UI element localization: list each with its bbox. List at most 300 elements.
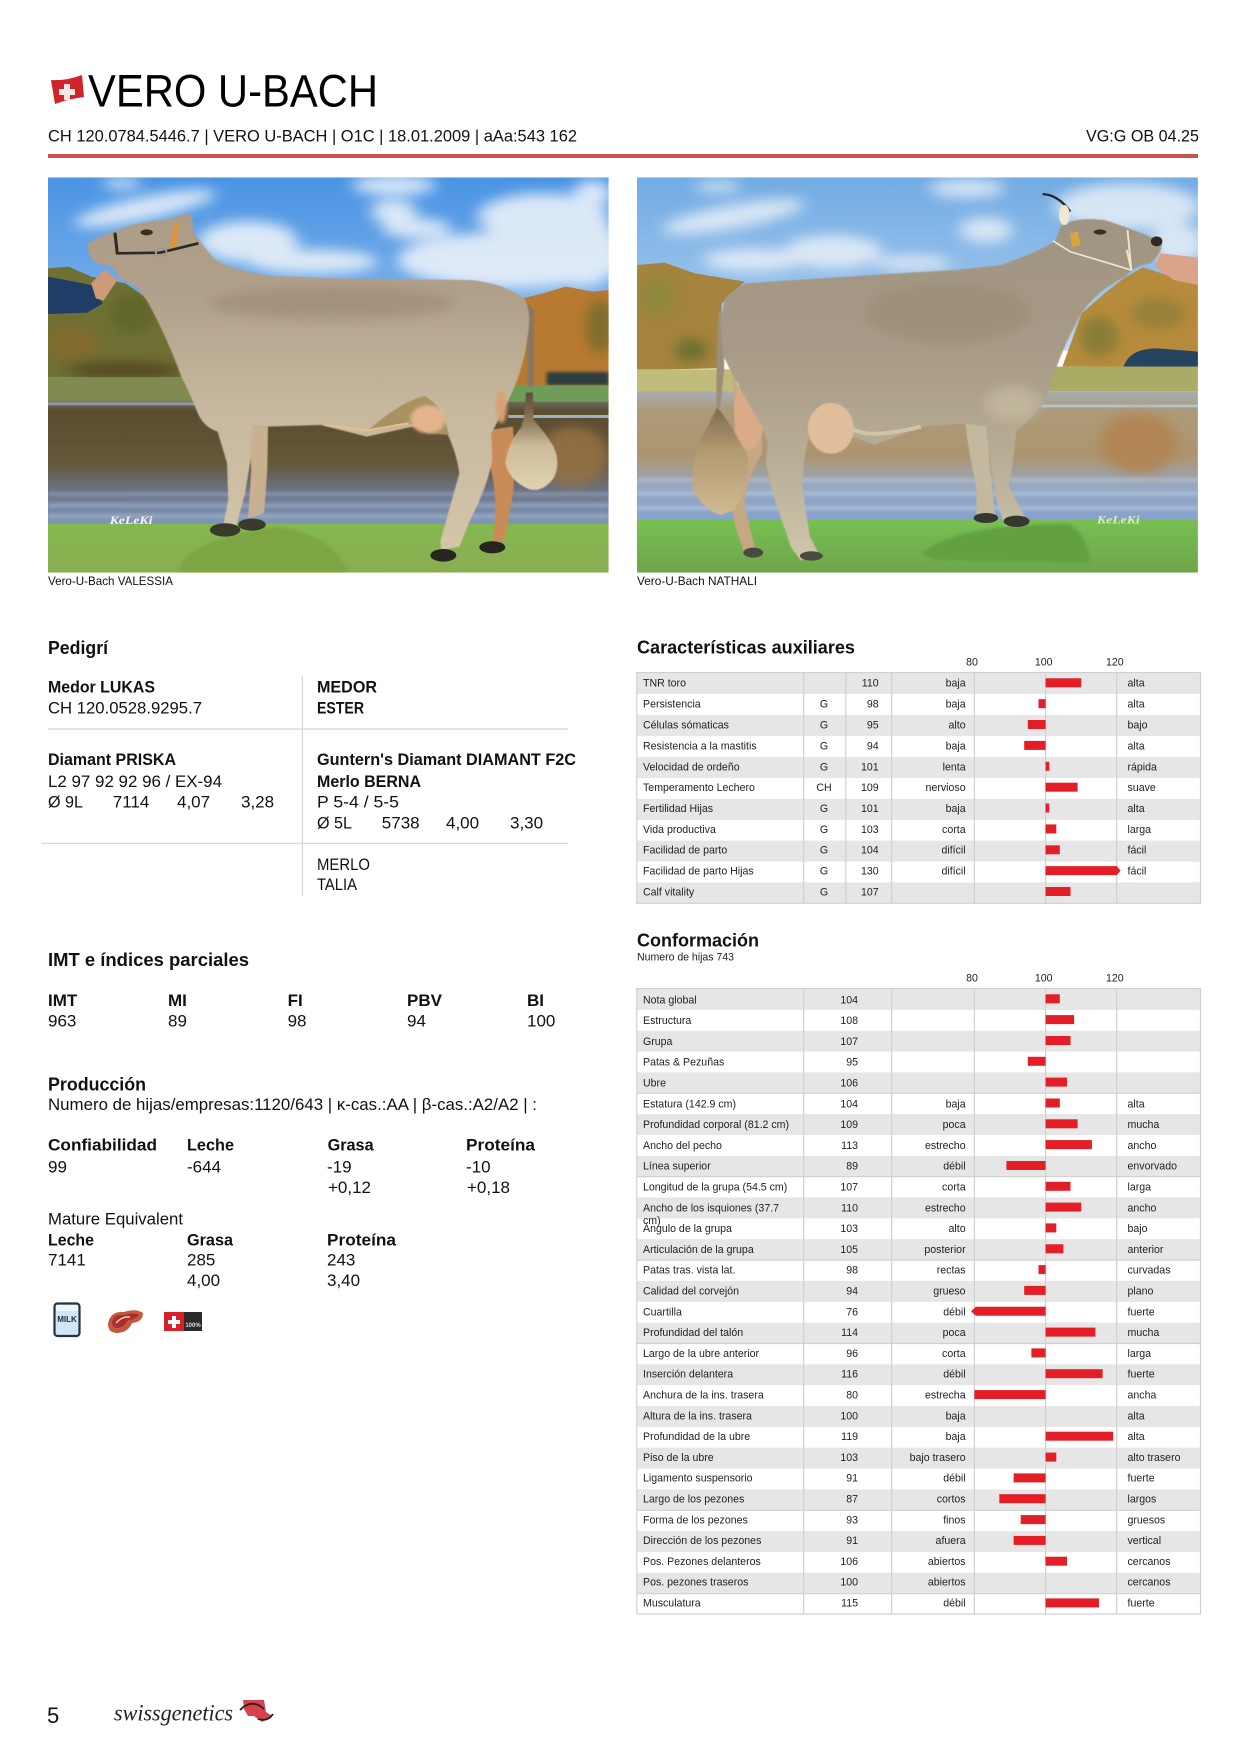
foreground grass (48, 524, 609, 573)
row: Piso de la ubre: bajo trasero (910, 1452, 966, 1464)
photo: cow Nathali: KeLeKi (1096, 513, 1140, 526)
row: Patas tras. vista lat. (643, 1265, 1170, 1277)
row: Largo de los pezones: 87 (846, 1494, 858, 1506)
mature equivalent values: 285 (187, 1250, 215, 1270)
production values: +0,18 (467, 1178, 510, 1197)
row: Facilidad de parto Hijas: Facilidad de parto Hijas (643, 866, 754, 878)
axis labels: auxiliary chart: 80 (966, 657, 978, 669)
production values: -19 (327, 1158, 352, 1176)
row: Altura de la ins. trasera (643, 1410, 1145, 1422)
row: Facilidad de parto (643, 845, 1146, 857)
row: Altura de la ins. trasera: alta (1128, 1410, 1145, 1422)
row: Largo de los pezones: Largo de los pezones (643, 1494, 744, 1506)
row: Velocidad de ordeño: Velocidad de ordeño (643, 761, 740, 773)
row: Profundidad del talón: mucha (1128, 1327, 1159, 1339)
row: Ubre (643, 1078, 1067, 1090)
daughters count: Numero de hijas 743 (637, 952, 734, 964)
IMT indices: 100 (527, 1012, 555, 1031)
row: Piso de la ubre: alto trasero (1128, 1452, 1181, 1464)
production values: Proteína (466, 1136, 536, 1155)
meadow (637, 369, 736, 393)
row: Ángulo de la grupa: bajo (1128, 1223, 1148, 1235)
row: Vida productiva (643, 824, 1151, 836)
row: Profundidad del talón: Profundidad del talón (643, 1327, 743, 1339)
pedigree: dam parents: P 5-4 / 5-5 (317, 792, 399, 812)
row: Cuartilla (643, 1306, 1155, 1318)
row: Musculatura: Musculatura (643, 1598, 701, 1610)
row: Anchura de la ins. trasera: ancha (1128, 1390, 1156, 1402)
row: Facilidad de parto: G (820, 845, 828, 857)
pedigree: dam: Ø 9L (48, 792, 83, 812)
row: Largo de los pezones: largos (1128, 1494, 1156, 1506)
row: TNR toro: TNR toro (643, 678, 686, 690)
row: Cuartilla: fuerte (1128, 1306, 1155, 1318)
row: Ancho de los isquiones: estrecho (925, 1202, 966, 1214)
row: Forma de los pezones (643, 1514, 1165, 1526)
mature equivalent values: 3,40 (327, 1271, 360, 1290)
mature equivalent values: 7141 (48, 1250, 86, 1270)
photo caption right: Vero-U-Bach NATHALI (637, 574, 757, 588)
IMT indices: 963 (48, 1012, 76, 1031)
row: Largo de la ubre anterior (643, 1348, 1151, 1360)
icon: swiss 100% label (164, 1312, 202, 1331)
row: Musculatura: fuerte (1128, 1598, 1155, 1610)
row: Largo de los pezones (643, 1494, 1156, 1506)
row: Profundidad corporal: 109 (840, 1119, 858, 1131)
IMT indices: 94 (407, 1012, 426, 1031)
production values: Leche (187, 1136, 234, 1155)
row: Pos. pezones traseros: cercanos (1128, 1577, 1170, 1589)
row: Pos. Pezones delanteros: Pos. Pezones delanteros (643, 1556, 761, 1568)
row: Cuartilla: 76 (846, 1306, 858, 1318)
row: Calidad del corvejón: grueso (933, 1286, 966, 1298)
row: Profundidad de la ubre: Profundidad de la ubre (643, 1431, 750, 1443)
row: Musculatura: 115 (841, 1598, 858, 1610)
row: Musculatura: débil (943, 1598, 966, 1610)
row: Patas & Pezuñas (643, 1057, 1046, 1069)
row: Anchura de la ins. trasera: estrecha (925, 1390, 966, 1402)
row: Ancho del pecho: estrecho (925, 1140, 966, 1152)
mature equivalent values: 4,00 (187, 1271, 220, 1290)
pedigree: dam parents: 3,30 (510, 814, 543, 832)
header: flag icon (51, 75, 84, 104)
photo: cow Nathali (637, 177, 1204, 573)
row: Temperamento Lechero (643, 782, 1156, 794)
row: Profundidad de la ubre (643, 1431, 1145, 1443)
row: Células sómaticas: Células sómaticas (643, 720, 729, 732)
IMT indices: IMT (48, 991, 78, 1010)
horn and halter (1043, 194, 1070, 212)
row: Persistencia: Persistencia (643, 699, 701, 711)
row: Velocidad de ordeño (643, 761, 1157, 773)
row: Musculatura (643, 1598, 1155, 1610)
pedigree: sire parents (317, 678, 377, 718)
mature equivalent values (48, 1210, 397, 1290)
IMT indices: 98 (288, 1012, 307, 1031)
mature equivalent values: Leche (48, 1230, 94, 1250)
row: Profundidad del talón: 114 (841, 1327, 858, 1339)
row: Ligamento suspensorio (643, 1473, 1155, 1485)
udder (367, 396, 449, 435)
row: Fertilidad Hijas (643, 803, 1145, 815)
heading: conformation: Conformación (637, 931, 759, 951)
row: Grupa (643, 1036, 1070, 1048)
row: Fertilidad Hijas: 101 (861, 803, 879, 815)
photo: cow Valessia (45, 175, 627, 573)
row: Cuartilla: débil (943, 1306, 966, 1318)
row: Ancho del pecho: 113 (841, 1140, 858, 1152)
row: Longitud de la grupa: 107 (840, 1182, 858, 1194)
IMT indices (48, 991, 555, 1031)
row: Dirección de los pezones: vertical (1128, 1535, 1161, 1547)
row: Piso de la ubre (643, 1452, 1181, 1464)
row: Calidad del corvejón: 94 (846, 1286, 858, 1298)
halter (115, 233, 198, 253)
production values (48, 1136, 536, 1197)
row: Ubre: 106 (840, 1078, 858, 1090)
row: Células sómaticas: 95 (867, 720, 879, 732)
row: Nota global: Nota global (643, 994, 697, 1006)
title: VERO U-BACH (88, 66, 378, 117)
row: Pos. Pezones delanteros (643, 1556, 1170, 1568)
row: Células sómaticas: G (820, 720, 828, 732)
row: Ancho de los isquiones: Ancho de los isquiones (37.7 (643, 1202, 779, 1214)
row: Longitud de la grupa: Longitud de la grupa (54.5 cm) (643, 1182, 787, 1194)
row: TNR toro (643, 678, 1145, 690)
row: Articulación de la grupa: 105 (840, 1244, 858, 1256)
row: Calf vitality (643, 887, 1070, 899)
row: Pos. pezones traseros: 100 (840, 1577, 858, 1589)
far legs (87, 213, 557, 550)
row: Vida productiva: G (820, 824, 828, 836)
row: Grupa: Grupa (643, 1036, 673, 1048)
row: Dirección de los pezones: Dirección de los pezones (643, 1535, 761, 1547)
row: Pos. Pezones delanteros: cercanos (1128, 1556, 1170, 1568)
pedigree: sire parents: MEDOR (317, 678, 377, 696)
row: Células sómaticas: alto (949, 720, 966, 732)
heading: pedigree: Pedigrí (48, 638, 109, 658)
row: Resistencia a la mastitis (643, 740, 1145, 752)
foreground grass (637, 519, 1198, 573)
row: Resistencia a la mastitis: baja (946, 740, 966, 752)
row: Patas & Pezuñas: 95 (846, 1057, 858, 1069)
water (48, 402, 609, 526)
row: Ancho de los isquiones (643, 1202, 1156, 1227)
row: Piso de la ubre: Piso de la ubre (643, 1452, 714, 1464)
row: Dirección de los pezones: 91 (846, 1535, 858, 1547)
arm (1155, 253, 1198, 285)
row: Velocidad de ordeño: rápida (1128, 761, 1157, 773)
row: Articulación de la grupa (643, 1244, 1164, 1256)
pedigree: dam (48, 750, 274, 812)
row: Línea superior: Línea superior (643, 1161, 711, 1173)
row: Estatura: 104 (840, 1098, 858, 1110)
IMT indices: BI (527, 991, 544, 1010)
pedigree: maternal grandparents (317, 855, 370, 894)
row: Grupa: 107 (840, 1036, 858, 1048)
far legs and tail (692, 219, 1162, 560)
row: Persistencia: G (820, 699, 828, 711)
row: Ancho del pecho (643, 1140, 1156, 1152)
trees (637, 263, 745, 370)
icon: milk glass (54, 1304, 80, 1336)
row: Profundidad corporal (643, 1119, 1159, 1131)
row: Estructura: 108 (840, 1015, 858, 1027)
row: Facilidad de parto: difícil (941, 845, 966, 857)
row: Resistencia a la mastitis: 94 (867, 740, 879, 752)
row: Línea superior (643, 1161, 1177, 1173)
row: Temperamento Lechero: suave (1128, 782, 1156, 794)
axis labels: conformation chart: 100 (1035, 973, 1053, 985)
row: Calf vitality: 107 (861, 887, 879, 899)
row: Estatura: baja (946, 1098, 966, 1110)
photo caption left: Vero-U-Bach VALESSIA (48, 574, 173, 588)
row: Ligamento suspensorio: débil (943, 1473, 966, 1485)
pedigree: sire: CH 120.0528.9295.7 (48, 698, 202, 718)
row: Pos. pezones traseros: abiertos (928, 1577, 966, 1589)
trees (48, 267, 195, 377)
production values: Grasa (328, 1136, 374, 1155)
row: Persistencia (643, 699, 1145, 711)
row: Pos. pezones traseros: Pos. pezones traseros (643, 1577, 748, 1589)
IMT indices: PBV (407, 991, 443, 1010)
row: Profundidad corporal: Profundidad corporal (81.2 cm) (643, 1119, 789, 1131)
row: Resistencia a la mastitis: alta (1128, 740, 1145, 752)
row: Nota global (643, 994, 1060, 1006)
pedigree: dam: 7114 (113, 792, 149, 812)
udder (808, 403, 854, 454)
pedigree: dam parents (317, 750, 576, 832)
row: Línea superior: 89 (846, 1161, 858, 1173)
pedigree: maternal grandparents: MERLO (317, 855, 370, 874)
pedigree: sire: Medor LUKAS (48, 678, 155, 696)
row: Estructura (643, 1015, 1074, 1027)
production values: +0,12 (328, 1178, 371, 1197)
row: Temperamento Lechero: 109 (861, 782, 879, 794)
row: Fertilidad Hijas: baja (946, 803, 966, 815)
row: Fertilidad Hijas: alta (1128, 803, 1145, 815)
pedigree: sire parents: ESTER (317, 698, 364, 718)
row: Ancho del pecho: Ancho del pecho (643, 1140, 722, 1152)
row: Inserción delantera: 116 (841, 1369, 858, 1381)
pedigree: dam parents: 5738 (382, 814, 420, 832)
row: Ligamento suspensorio: Ligamento suspensorio (643, 1473, 753, 1485)
row: Ángulo de la grupa: Ángulo de la grupa (643, 1222, 732, 1235)
photo: cow Valessia: KeLeKi (108, 514, 153, 527)
row: Facilidad de parto: 104 (861, 845, 879, 857)
mature equivalent values: Mature Equivalent (48, 1210, 183, 1228)
hooves (974, 513, 998, 523)
IMT indices: FI (288, 991, 303, 1010)
row: Largo de los pezones: cortos (937, 1494, 966, 1506)
row: Patas tras. vista lat.: 98 (846, 1265, 858, 1277)
pedigree: dam parents: 4,00 (446, 814, 479, 832)
production values: -644 (187, 1158, 221, 1176)
icon: swiss 100% label: 100% (185, 1323, 201, 1329)
row: Profundidad corporal: mucha (1128, 1119, 1159, 1131)
mature equivalent values: Proteína (327, 1230, 397, 1250)
row: Articulación de la grupa: posterior (924, 1244, 966, 1256)
axis labels: conformation chart (966, 973, 1124, 985)
row: Ubre: Ubre (643, 1078, 666, 1090)
row: Calidad del corvejón: plano (1128, 1286, 1154, 1298)
row: Largo de la ubre anterior: 96 (846, 1348, 858, 1360)
row: Dirección de los pezones: afuera (936, 1535, 966, 1547)
row: Ángulo de la grupa: 103 (840, 1223, 858, 1235)
row: Dirección de los pezones (643, 1535, 1161, 1547)
row: Fertilidad Hijas: G (820, 803, 828, 815)
pedigree: sire (48, 678, 202, 718)
row: Calf vitality: G (820, 887, 828, 899)
row: Resistencia a la mastitis: G (820, 740, 828, 752)
row: Línea superior: débil (943, 1161, 966, 1173)
row: Profundidad del talón (643, 1327, 1159, 1339)
hooves (210, 523, 240, 537)
row: Ancho del pecho: ancho (1128, 1140, 1156, 1152)
pedigree: dam: Diamant PRISKA (48, 750, 176, 769)
row: Ángulo de la grupa (643, 1222, 1148, 1235)
row: Células sómaticas: bajo (1128, 720, 1148, 732)
row: Facilidad de parto Hijas: 130 (861, 866, 879, 878)
row: Longitud de la grupa: larga (1128, 1182, 1151, 1194)
row: Persistencia: baja (946, 699, 966, 711)
row: Patas tras. vista lat.: Patas tras. vista lat. (643, 1265, 735, 1277)
row: Vida productiva: larga (1128, 824, 1151, 836)
red header rule (48, 154, 1198, 158)
axis labels: auxiliary chart (966, 657, 1124, 669)
row: Anchura de la ins. trasera (643, 1390, 1156, 1402)
row: Velocidad de ordeño: lenta (943, 761, 966, 773)
row: Piso de la ubre: 103 (840, 1452, 858, 1464)
axis labels: auxiliary chart: 100 (1035, 657, 1053, 669)
row: Calidad del corvejón: Calidad del corvejón (643, 1286, 739, 1298)
row: Ancho de los isquiones: ancho (1128, 1202, 1156, 1214)
water (637, 391, 1198, 521)
row: Longitud de la grupa (643, 1182, 1151, 1194)
row: Estatura: alta (1128, 1098, 1145, 1110)
row: Altura de la ins. trasera: Altura de la ins. trasera (643, 1410, 752, 1422)
icon: milk glass: MILK (57, 1315, 77, 1324)
row: Pos. pezones traseros (643, 1577, 1170, 1589)
axis labels: conformation chart: 80 (966, 973, 978, 985)
row: Articulación de la grupa: anterior (1128, 1244, 1164, 1256)
heading: auxiliary traits: Características auxiliares (637, 637, 855, 657)
row: Facilidad de parto Hijas: difícil (941, 866, 966, 878)
production values: -10 (466, 1158, 491, 1176)
pedigree: dam: 4,07 (177, 792, 210, 812)
pedigree: maternal grandparents: TALIA (317, 875, 358, 894)
row: Ancho de los isquiones: 110 (841, 1202, 858, 1214)
row: Facilidad de parto Hijas: G (820, 866, 828, 878)
row: Velocidad de ordeño: 101 (861, 761, 879, 773)
pedigree grid lines (41, 676, 568, 896)
row: Persistencia: alta (1128, 699, 1145, 711)
row: Ligamento suspensorio: fuerte (1128, 1473, 1155, 1485)
row: Inserción delantera: débil (943, 1369, 966, 1381)
row: Largo de la ubre anterior: corta (942, 1348, 966, 1360)
pedigree: dam parents: Guntern's Diamant DIAMANT F2C (317, 750, 576, 769)
row: Vida productiva: corta (942, 824, 966, 836)
row: Estatura: Estatura (142.9 cm) (643, 1098, 736, 1110)
row: Inserción delantera: Inserción delantera (643, 1369, 733, 1381)
row: Temperamento Lechero: Temperamento Lechero (643, 782, 755, 794)
page number: 5 (47, 1703, 59, 1728)
pedigree: dam: L2 97 92 92 96 / EX-94 (48, 772, 222, 791)
row: Articulación de la grupa: Articulación de la grupa (643, 1244, 754, 1256)
row: Inserción delantera: fuerte (1128, 1369, 1155, 1381)
row: TNR toro: baja (946, 678, 966, 690)
row: Temperamento Lechero: nervioso (926, 782, 966, 794)
IMT indices: 89 (168, 1012, 187, 1031)
production values: Confiabilidad (48, 1136, 157, 1155)
row: Resistencia a la mastitis: Resistencia a la mastitis (643, 740, 757, 752)
row: Forma de los pezones: Forma de los pezones (643, 1514, 748, 1526)
row: Vida productiva: 103 (861, 824, 879, 836)
pedigree: dam: 3,28 (241, 792, 274, 812)
row: Profundidad del talón: poca (943, 1327, 966, 1339)
row: Forma de los pezones: finos (943, 1514, 966, 1526)
classification: VG:G OB 04.25 (1086, 127, 1199, 146)
row: Forma de los pezones: gruesos (1128, 1514, 1165, 1526)
icon: meat (108, 1310, 143, 1333)
row: Patas tras. vista lat.: rectas (937, 1265, 966, 1277)
pedigree: dam parents: Merlo BERNA (317, 772, 421, 791)
row: Células sómaticas (643, 720, 1148, 732)
row: Altura de la ins. trasera: baja (946, 1410, 966, 1422)
row: Patas & Pezuñas: Patas & Pezuñas (643, 1057, 724, 1069)
row: Altura de la ins. trasera: 100 (840, 1410, 858, 1422)
row: Velocidad de ordeño: G (820, 761, 828, 773)
production values: 99 (48, 1158, 67, 1176)
row: Forma de los pezones: 93 (846, 1514, 858, 1526)
row: Persistencia: 98 (867, 699, 879, 711)
row: Línea superior: envorvado (1128, 1161, 1177, 1173)
row: TNR toro: alta (1128, 678, 1145, 690)
tail (527, 303, 534, 387)
heading: production: Producción (48, 1075, 146, 1095)
row: Patas tras. vista lat.: curvadas (1128, 1265, 1170, 1277)
row: Largo de la ubre anterior: Largo de la ubre anterior (643, 1348, 759, 1360)
footer logo text: swissgenetics (114, 1701, 233, 1726)
row: Pos. Pezones delanteros: 106 (840, 1556, 858, 1568)
row: Calidad del corvejón (643, 1286, 1154, 1298)
row: Estructura: Estructura (643, 1015, 691, 1027)
row: Facilidad de parto: Facilidad de parto (643, 845, 727, 857)
arm (48, 277, 103, 314)
mature equivalent values: Grasa (187, 1230, 234, 1250)
IMT indices: MI (168, 991, 187, 1010)
row: Longitud de la grupa: corta (942, 1182, 966, 1194)
row: Ángulo de la grupa: alto (949, 1223, 966, 1235)
row: Calf vitality: Calf vitality (643, 887, 695, 899)
row: Estatura (643, 1098, 1145, 1110)
production summary line: Numero de hijas/empresas:1120/643 | κ-cas.:AA | β-cas.:A2/A2 | : (48, 1095, 537, 1114)
row: Profundidad de la ubre: baja (946, 1431, 966, 1443)
row: Ancho de los isquiones: cm) (643, 1215, 661, 1227)
axis labels: conformation chart: 120 (1106, 973, 1124, 985)
axis labels: auxiliary chart: 120 (1106, 657, 1124, 669)
subtitle: identification line: CH 120.0784.5446.7 | VERO U-BACH | O1C | 18.01.2009 | aAa:543 162 (48, 127, 577, 146)
body (720, 219, 1162, 560)
row: Inserción delantera (643, 1369, 1155, 1381)
row: Largo de la ubre anterior: larga (1128, 1348, 1151, 1360)
row: Facilidad de parto Hijas (643, 866, 1146, 878)
row: Fertilidad Hijas: Fertilidad Hijas (643, 803, 713, 815)
row: Nota global: 104 (840, 994, 858, 1006)
row: Profundidad de la ubre: 119 (841, 1431, 858, 1443)
row: Anchura de la ins. trasera: 80 (846, 1390, 858, 1402)
row: TNR toro: 110 (862, 678, 879, 690)
